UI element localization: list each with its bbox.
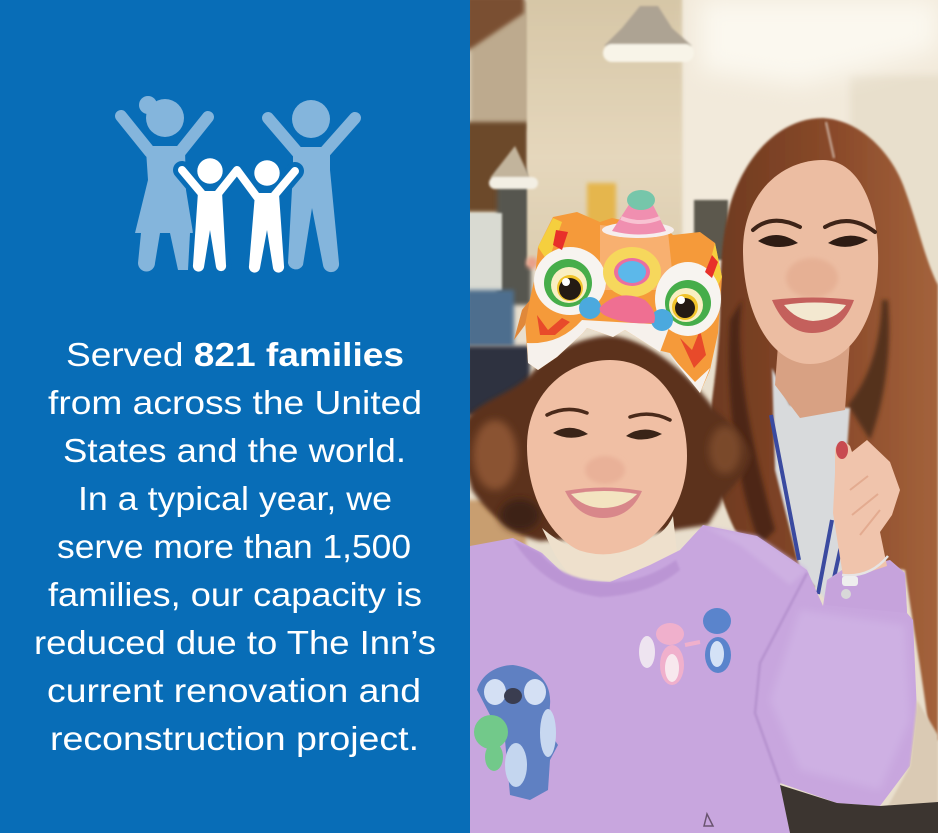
text block: families served: current renovation and (47, 672, 421, 709)
icon: father (268, 100, 355, 272)
mask hat (602, 190, 674, 238)
photo background: room (466, 0, 938, 833)
mask forehead flower and nose (579, 247, 673, 331)
text block: families served: reconstruction project. (50, 720, 419, 757)
text block: families served: In a typical year, we (78, 480, 392, 517)
icon: mother (121, 96, 208, 272)
woman lanyard (771, 415, 841, 594)
text block: families served: from across the United (48, 384, 422, 421)
lion mask (514, 190, 722, 393)
text block: families served (34, 336, 436, 757)
text block: families served: States and the world. (63, 432, 406, 469)
child hair (466, 336, 751, 541)
mask lower white band (527, 320, 710, 393)
mask eyes (534, 247, 721, 336)
woman clothing at lower right (780, 700, 938, 833)
mask cheek markings (537, 315, 570, 335)
woman neck and face (743, 160, 878, 418)
text block: families served: serve more than 1,500 (57, 528, 411, 565)
woman blouse (772, 368, 850, 600)
photo: child in lion mask with smiling woman (466, 0, 938, 833)
woman hair (711, 118, 938, 742)
text block: families served: reduced due to The Inn’s (34, 624, 436, 661)
child face mask under chin (542, 516, 675, 556)
lilac sweatshirt (470, 525, 917, 833)
child face (527, 360, 687, 556)
text block: families served: families, our capacity is (48, 576, 422, 613)
cartoon character print: large (474, 665, 558, 800)
child raised fist and bracelet (833, 440, 900, 599)
icon: two children (182, 158, 295, 273)
cartoon character print: pair (639, 608, 731, 826)
panel: blue text panel (0, 0, 470, 833)
ceiling lamps (489, 6, 694, 189)
icon: family with raised arms (121, 96, 355, 273)
text block: families served: Served 821 families (66, 336, 404, 373)
